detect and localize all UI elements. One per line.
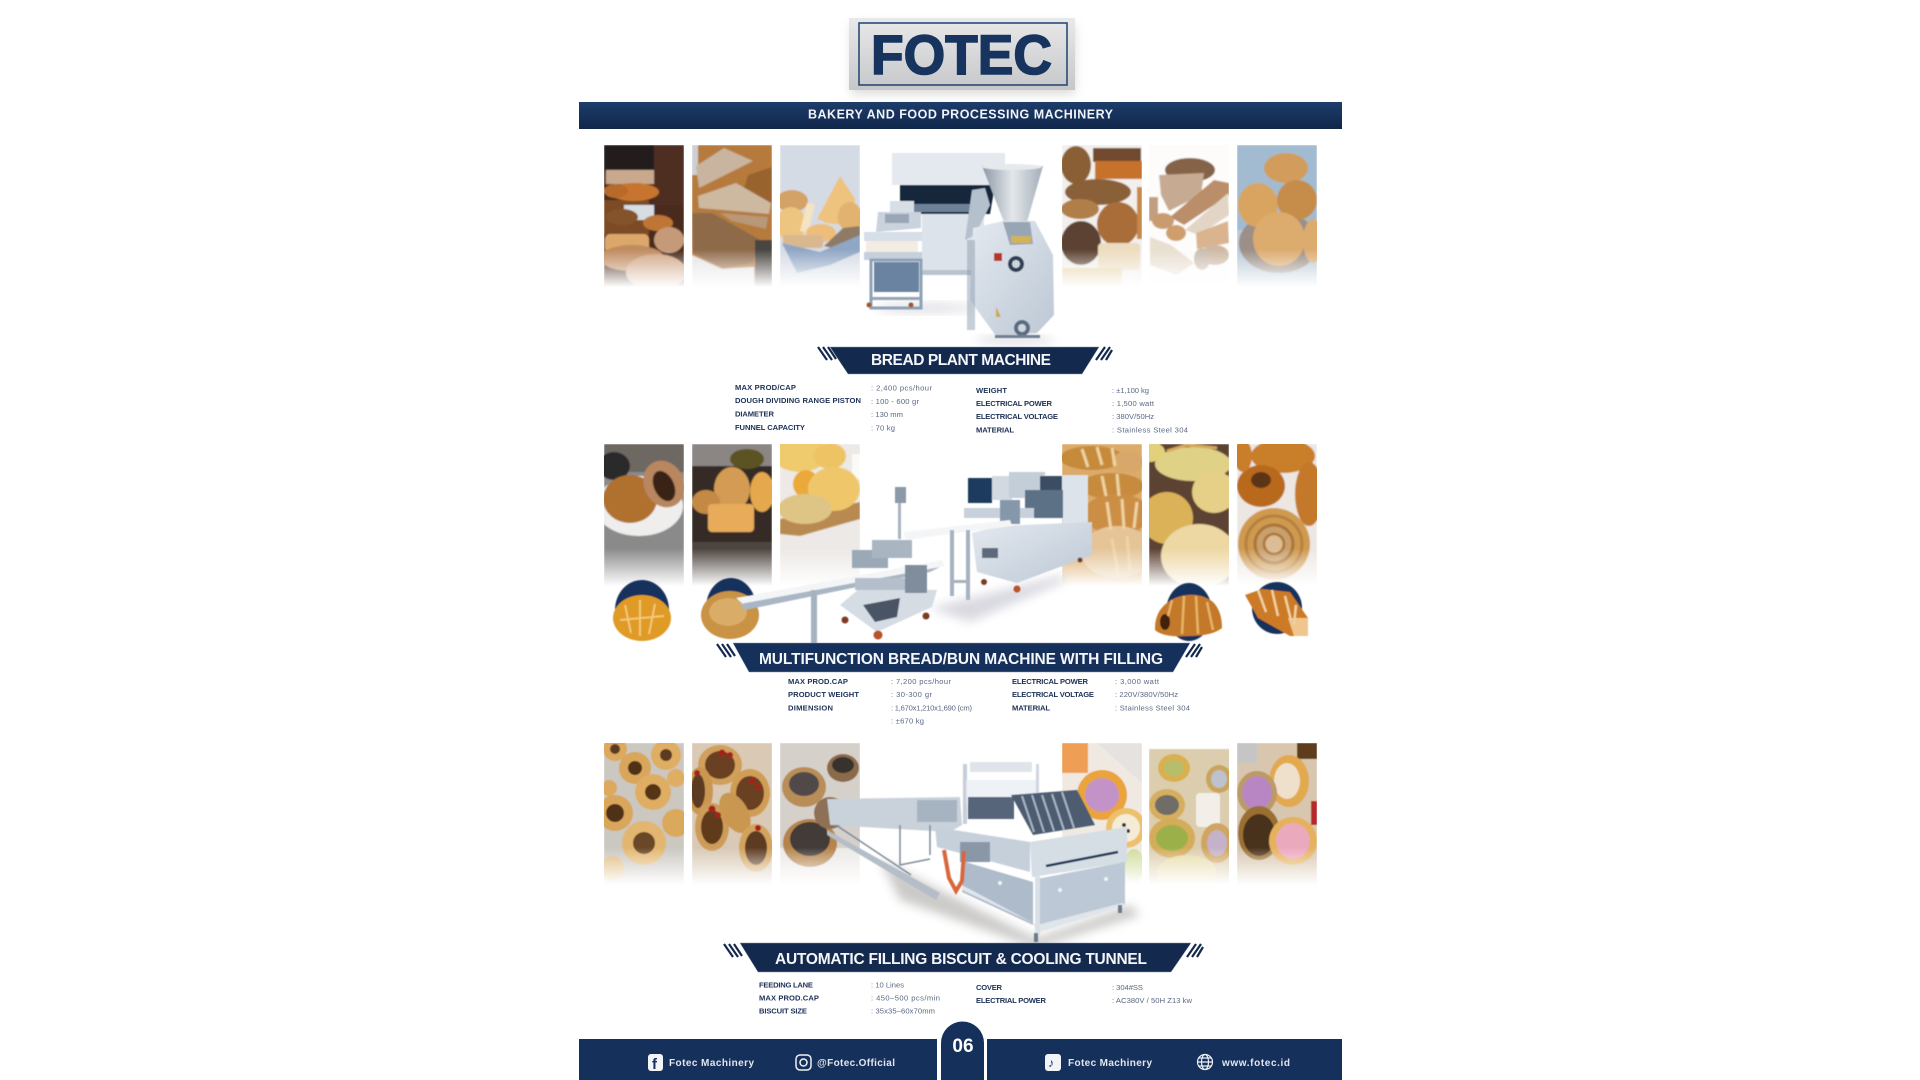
icon: pain au chocolat in circle xyxy=(1155,583,1222,641)
specs: tunnel right column: ELECTRIAL POWER xyxy=(976,996,1047,1005)
header bar: BAKERY AND FOOD PROCESSING MACHINERY xyxy=(808,108,1114,122)
photo: baguettes in basket xyxy=(780,145,860,280)
banner: multifunction machine xyxy=(717,643,1202,672)
specs: tunnel left column: : 10 Lines xyxy=(871,980,904,990)
specs: bread plant left column: : 70 kg xyxy=(871,424,895,432)
specs: multifunction right column: : Stainless Steel 304 xyxy=(1115,704,1190,712)
photo: bread buns xyxy=(1237,145,1317,282)
footer bar left xyxy=(579,1039,937,1080)
specs: multifunction left column: : ±670 kg xyxy=(891,716,924,726)
specs: multifunction left column: : 7,200 pcs/hour xyxy=(891,677,951,686)
specs: multifunction right column: : 220V/380V/50Hz xyxy=(1115,690,1178,699)
specs: tunnel left column: : 450–500 pcs/min xyxy=(871,994,940,1002)
photo: colourful custard tarts with milk xyxy=(1149,748,1229,882)
specs: multifunction left column: DIMENSION xyxy=(788,704,833,712)
text: facebook handle: Fotec Machinery xyxy=(669,1058,754,1069)
photo: golden buns close-up xyxy=(1062,444,1142,584)
specs: tunnel left column: BISCUIT SIZE xyxy=(759,1006,807,1016)
icon: facebook xyxy=(648,1054,663,1073)
specs: bread plant left column: FUNNEL CAPACITY xyxy=(735,423,805,432)
specs: bread plant left column: : 2,400 pcs/hour xyxy=(871,384,932,392)
photo: assorted rye loaves xyxy=(1061,145,1142,290)
logo: FOTEC: FOTEC xyxy=(871,23,1052,86)
machine: multifunction bread line xyxy=(736,472,1092,644)
specs: multifunction right column: : 3,000 watt xyxy=(1115,677,1160,686)
icon: instagram xyxy=(796,1055,811,1070)
specs: bread plant right column: : ±1,100 kg xyxy=(1112,386,1149,395)
icon: tiktok xyxy=(1045,1054,1061,1071)
specs: bread plant left column: DIAMETER xyxy=(735,410,775,418)
specs: bread plant right column: ELECTRICAL POWER xyxy=(976,399,1053,408)
specs: bread plant right column: : 380V/50Hz xyxy=(1112,412,1154,421)
specs: bread plant left column: MAX PROD/CAP xyxy=(735,383,796,392)
specs: bread plant left column: : 130 mm xyxy=(871,410,903,419)
banner: automatic filling biscuit xyxy=(724,943,1203,972)
text: tiktok handle: Fotec Machinery xyxy=(1068,1058,1152,1069)
icon: facebook: f xyxy=(652,1056,658,1073)
specs: multifunction left column: PRODUCT WEIGHT xyxy=(788,690,859,699)
specs: tunnel right column xyxy=(976,983,1193,1005)
photo: jam ring cookies xyxy=(604,743,684,880)
icon: round coconut bun in circle xyxy=(701,578,759,639)
specs: tunnel left column: MAX PROD.CAP xyxy=(759,994,819,1002)
specs: bread plant right column: : Stainless Steel 304 xyxy=(1112,426,1188,434)
specs: tunnel left column: : 35x35–60x70mm xyxy=(871,1006,935,1016)
page number tab xyxy=(941,1022,984,1080)
specs: tunnel left column xyxy=(759,980,940,1016)
panel: bread plant machine xyxy=(600,145,1323,434)
logo: FOTEC xyxy=(849,18,1075,94)
photo: purple custard tarts xyxy=(1062,743,1146,888)
panel: automatic filling biscuit and cooling tunnel xyxy=(597,737,1317,1016)
icon: croissant in circle xyxy=(1245,582,1308,636)
specs: bread plant left column: : 100 - 600 gr xyxy=(871,397,919,406)
footer xyxy=(579,1022,1342,1080)
footer bar right xyxy=(987,1039,1342,1080)
photo: dark chocolate tarts xyxy=(780,743,860,872)
specs: tunnel left column: FEEDING LANE xyxy=(759,980,813,990)
photo: red bean bun on plate xyxy=(604,444,684,584)
specs: multifunction left column: : 1,670x1,210x1,690 (cm) xyxy=(891,704,972,712)
specs: multifunction right column: ELECTRICAL VOLTAGE xyxy=(1012,690,1094,699)
specs: tunnel right column: COVER xyxy=(976,983,1003,992)
banner: bread plant machine xyxy=(818,347,1112,374)
specs: multifunction left column xyxy=(788,677,972,726)
photo: chocolate tarts with berries xyxy=(692,743,772,881)
photo: sliced sourdough xyxy=(692,145,772,290)
photo: cinnamon rolls xyxy=(1237,444,1317,580)
specs: multifunction right column: ELECTRICAL POWER xyxy=(1012,677,1089,686)
specs: bread plant right column: MATERIAL xyxy=(976,426,1014,434)
photo: melon pan on board xyxy=(780,444,860,574)
specs: bread plant right column xyxy=(976,386,1188,434)
specs: tunnel right column: : 304#SS xyxy=(1112,983,1143,992)
icon: globe xyxy=(1198,1054,1212,1070)
specs: multifunction right column: MATERIAL xyxy=(1012,704,1050,712)
specs: bread plant right column: ELECTRICAL VOLTAGE xyxy=(976,412,1058,421)
photo: soft buns on cooling rack xyxy=(1149,444,1229,584)
specs: tunnel right column: : AC380V / 50H Z13 kw xyxy=(1112,996,1193,1005)
page number tab: 06 xyxy=(952,1036,974,1057)
photo: pineapple cakes xyxy=(692,444,774,589)
specs: multifunction left column: : 30-300 gr xyxy=(891,690,932,699)
text: instagram handle: @Fotec.Official xyxy=(817,1058,895,1069)
specs: multifunction right column xyxy=(1012,677,1190,712)
specs: bread plant left column: DOUGH DIVIDING RANGE PISTON xyxy=(735,396,861,405)
machine: bread plant xyxy=(864,153,1055,344)
icon: tiktok: ♪ xyxy=(1048,1056,1054,1070)
specs: bread plant right column: : 1,500 watt xyxy=(1112,399,1155,408)
specs: bread plant right column: WEIGHT xyxy=(976,386,1007,395)
machine: filling biscuit and cooling tunnel xyxy=(827,762,1140,948)
photo: pink and chocolate tart shells xyxy=(1237,743,1317,888)
photo: sliced white loaves xyxy=(1149,157,1229,274)
banner: bread plant machine: BREAD PLANT MACHINE xyxy=(871,352,1051,369)
specs: multifunction left column: MAX PROD.CAP xyxy=(788,677,848,686)
icon: melon pan bun in circle xyxy=(613,580,671,641)
text: website: www.fotec.id xyxy=(1221,1058,1290,1069)
photo: bakery shelf breads xyxy=(600,145,686,290)
banner: multifunction machine: MULTIFUNCTION BREAD/BUN MACHINE WITH FILLING xyxy=(759,651,1163,668)
panel: multifunction bread/bun machine xyxy=(595,436,1323,726)
header bar xyxy=(579,102,1342,129)
specs: bread plant left column xyxy=(735,383,932,432)
banner: automatic filling biscuit: AUTOMATIC FILLING BISCUIT & COOLING TUNNEL xyxy=(775,951,1147,968)
